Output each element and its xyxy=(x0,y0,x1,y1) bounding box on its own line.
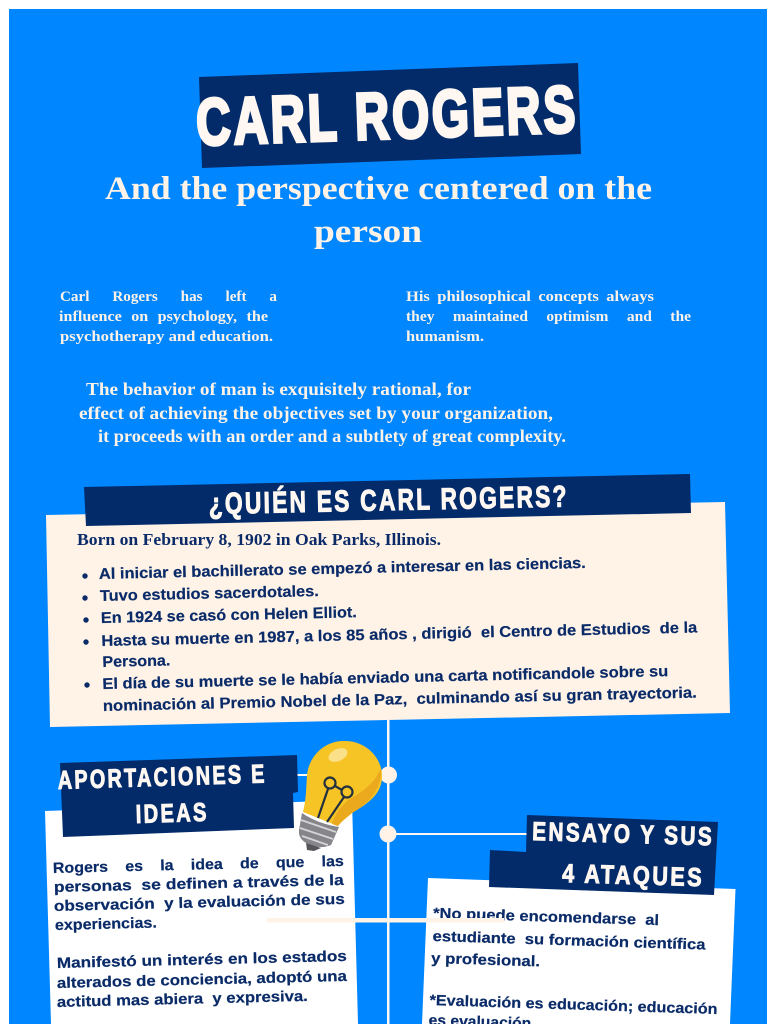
heading banner: ensayo y sus 4 ataques xyxy=(489,815,718,895)
heading banner: ensayo y sus 4 ataques: ENSAYO Y SUS xyxy=(532,816,715,851)
heading banner: quien es Carl Rogers xyxy=(84,474,691,526)
bullet list: Al iniciar el bachillerato se empezó a interesar en las ciencias. xyxy=(99,555,586,583)
panel: who is Carl Rogers xyxy=(46,474,730,727)
quote text: The behavior of man is exquisitely rational, for xyxy=(86,379,471,399)
intro text: right column: they maintained optimism and the xyxy=(406,309,691,325)
quote text: effect of achieving the objectives set by your organization, xyxy=(79,403,553,423)
intro text: right column xyxy=(406,289,691,345)
intro text: right column: His philosophical concepts always xyxy=(406,289,654,305)
intro text: right column: humanism. xyxy=(406,329,484,345)
heading banner: aportaciones e ideas: APORTACIONES E xyxy=(57,758,267,795)
intro text: left column: psychotherapy and education. xyxy=(60,329,273,345)
heading banner: quien es Carl Rogers: ¿QUIÉN ES CARL ROGERS? xyxy=(208,479,569,521)
quote text xyxy=(79,379,566,446)
body text: aportaciones: personas se definen a través de la xyxy=(54,872,345,896)
bullet list: En 1924 se casó con Helen Elliot. xyxy=(101,604,357,627)
intro text: left column: Carl Rogers has left a xyxy=(60,289,278,305)
bullet list: El día de su muerte se le había enviado una carta notificandole sobre su xyxy=(102,663,668,693)
bullet list: Hasta su muerte en 1987, a los 85 años , dirigió el Centro de Estudios de la xyxy=(101,619,698,650)
body text: ensayo: *Evaluación es educación; educación xyxy=(429,992,718,1018)
body text: ensayo: y profesional. xyxy=(431,950,540,970)
heading banner: ensayo y sus 4 ataques: 4 ATAQUES xyxy=(562,858,705,892)
subtitle: person xyxy=(314,214,422,250)
bullet list: Tuvo estudios sacerdotales. xyxy=(100,583,319,605)
bullet list xyxy=(82,555,698,715)
body text: aportaciones: Manifestó un interés en los estados xyxy=(57,948,347,972)
timeline connector xyxy=(296,720,528,1024)
body text: aportaciones: observación y la evaluación de sus xyxy=(54,891,345,915)
bullet list: nominación al Premio Nobel de la Paz, culminando así su gran trayectoria. xyxy=(103,685,697,715)
body text: ensayo xyxy=(428,905,718,1024)
subtitle: And the perspective centered on the xyxy=(105,171,652,207)
intro text: left column: influence on psychology, the xyxy=(59,309,268,325)
birth line: Born on February 8, 1902 in Oak Parks, Illinois. xyxy=(77,530,441,549)
panel: ensayo y sus 4 ataques xyxy=(422,815,736,1024)
body text: aportaciones: Rogers es la idea de que las xyxy=(53,853,344,877)
subtitle xyxy=(105,171,652,250)
heading banner: aportaciones e ideas: IDEAS xyxy=(135,797,209,829)
title banner: CARL ROGERS xyxy=(195,72,579,159)
body text: aportaciones: experiencias. xyxy=(55,915,157,934)
panel: aportaciones e ideas xyxy=(45,755,358,1024)
quote text: it proceeds with an order and a subtlety of great complexity. xyxy=(98,426,566,446)
body text: aportaciones: alterados de conciencia, adoptó una xyxy=(57,968,348,992)
bullet list: Persona. xyxy=(102,652,171,671)
body text: aportaciones: actitud mas abiera y expresiva. xyxy=(57,988,308,1011)
intro text: left column xyxy=(59,289,278,345)
body text: aportaciones xyxy=(53,853,348,1011)
timeline cross bar xyxy=(267,918,504,922)
title banner xyxy=(195,63,581,168)
icon: light bulb xyxy=(299,741,382,851)
heading banner: aportaciones e ideas xyxy=(57,755,298,837)
body text: ensayo: *No puede encomendarse al xyxy=(433,905,659,929)
body text: ensayo: estudiante su formación científica xyxy=(432,928,706,954)
